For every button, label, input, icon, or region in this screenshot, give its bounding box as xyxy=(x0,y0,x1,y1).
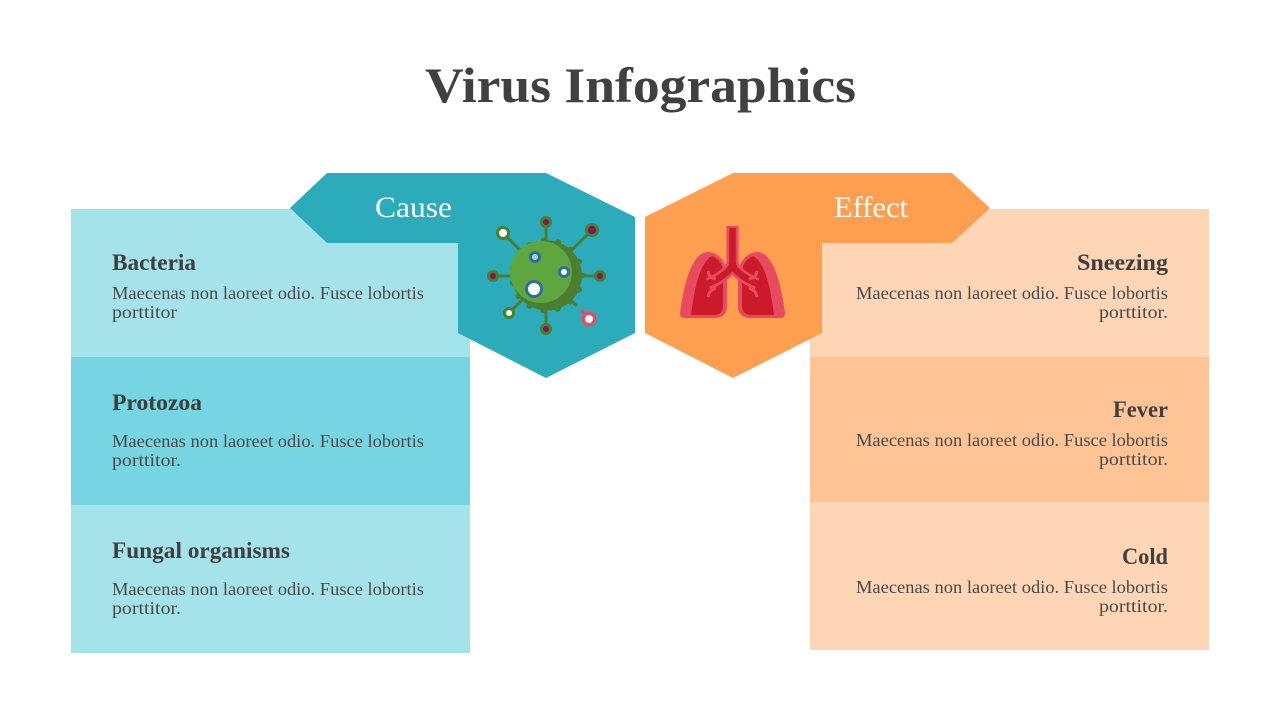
text: sneezing description xyxy=(856,283,1168,322)
panel: cold xyxy=(810,502,1209,650)
left lung xyxy=(680,252,727,318)
heading: fever: Fever xyxy=(1113,397,1168,422)
panel: bacteria xyxy=(71,209,470,357)
text: fever description xyxy=(856,430,1168,469)
cause banner xyxy=(290,173,635,378)
heading: fungal organisms: Fungal organisms xyxy=(112,538,290,563)
heading: bacteria: Bacteria xyxy=(112,250,197,275)
title: Virus Infographics xyxy=(425,57,856,113)
label: cause: Cause xyxy=(375,191,452,224)
text: bacteria description: porttitor xyxy=(112,302,177,322)
text: fungal description: porttitor. xyxy=(112,598,181,618)
icon: lungs xyxy=(680,226,785,318)
icon: virus xyxy=(487,216,606,335)
panel: fever xyxy=(810,357,1209,502)
panel: sneezing xyxy=(810,209,1209,357)
heading: cold: Cold xyxy=(1122,544,1168,569)
right lung xyxy=(738,252,785,318)
heading: sneezing: Sneezing xyxy=(1077,250,1169,275)
text: cold description: porttitor. xyxy=(1099,596,1168,616)
text: fever description: porttitor. xyxy=(1099,449,1168,469)
text: fungal description: Maecenas non laoreet odio. Fusce lobortis xyxy=(112,579,424,599)
text: bacteria description xyxy=(112,283,424,322)
text: sneezing description: porttitor. xyxy=(1099,302,1168,322)
text: fungal description xyxy=(112,579,424,618)
heading: protozoa: Protozoa xyxy=(112,390,203,415)
text: protozoa description xyxy=(112,431,424,470)
panel: fungal organisms xyxy=(71,505,470,653)
effect banner xyxy=(645,173,990,378)
text: sneezing description: Maecenas non laoreet odio. Fusce lobortis xyxy=(856,283,1168,303)
trachea and bronchi xyxy=(708,226,757,284)
text: fever description: Maecenas non laoreet odio. Fusce lobortis xyxy=(856,430,1168,450)
virus spots xyxy=(525,251,570,298)
text: cold description: Maecenas non laoreet odio. Fusce lobortis xyxy=(856,577,1168,597)
detached red spike xyxy=(581,310,596,326)
panel: protozoa xyxy=(71,357,470,505)
text: protozoa description: porttitor. xyxy=(112,450,181,470)
text: cold description xyxy=(856,577,1168,616)
virus spikes xyxy=(487,216,606,335)
text: bacteria description: Maecenas non laoreet odio. Fusce lobortis xyxy=(112,283,424,303)
label: effect: Effect xyxy=(834,191,909,224)
text: protozoa description: Maecenas non laoreet odio. Fusce lobortis xyxy=(112,431,424,451)
